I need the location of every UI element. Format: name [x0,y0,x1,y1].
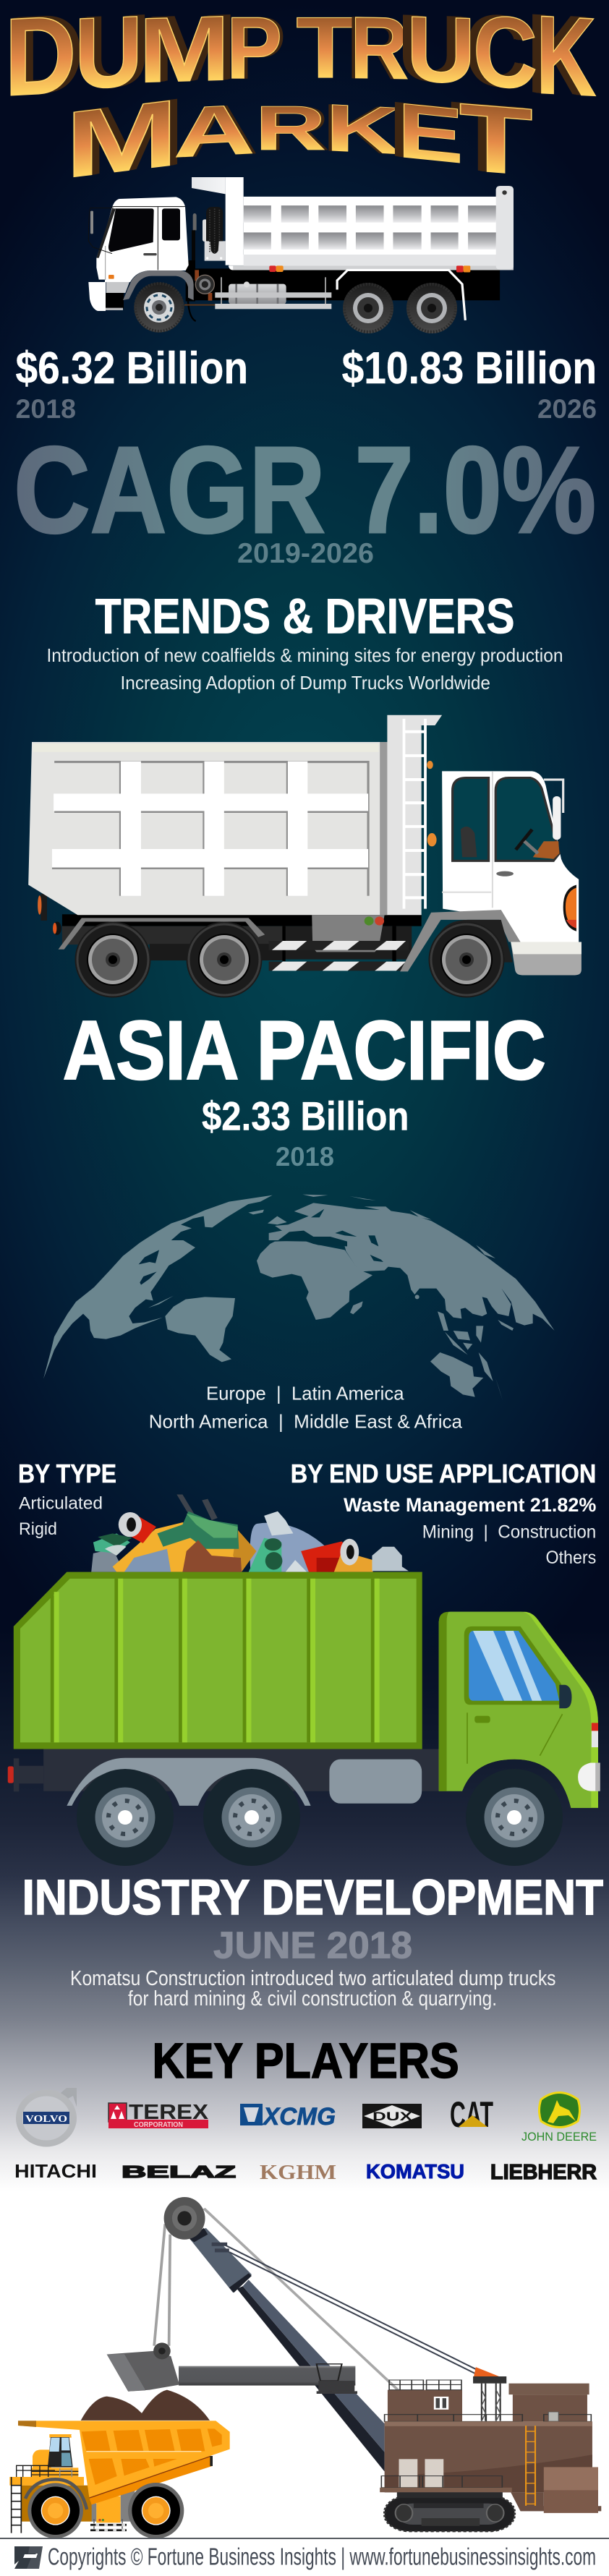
development date: JUNE 2018 [213,1925,412,1967]
gantry [473,2367,506,2421]
heading: trends and drivers: TRENDS & DRIVERS [95,589,515,644]
logo: John Deere [521,2093,597,2144]
year 2018: 2018 [16,393,76,424]
rear frame [92,2490,135,2522]
wheel: front [428,921,505,998]
tank block with lamps [96,2496,121,2522]
illustration: white dump truck [88,177,514,333]
container [14,1572,422,1749]
British Isles [268,1216,287,1224]
trend line 1: Introduction of new coalfields & mining sites for energy production [46,644,563,666]
logo: Fortune Business Insights [14,2546,43,2569]
South America [165,1297,235,1362]
front lights [592,1723,598,1731]
title: Dump Truck Market: E [398,87,463,180]
shovel boom [189,2228,385,2472]
title: Dump Truck Market: A [174,89,255,172]
access ladder [12,2477,21,2533]
spare tyre [206,207,223,254]
wheel: front [135,282,184,333]
wheel: rear 2 [187,921,262,998]
Mediterranean [277,1231,347,1246]
steps [90,2519,127,2532]
CAGR period: 2019-2026 [237,538,374,569]
fuel tank [229,284,286,304]
application: others: Others [545,1548,596,1568]
cab [31,2434,83,2477]
windscreen [464,1626,561,1705]
machinery house [380,2380,601,2513]
exhaust [193,213,197,230]
illustration: rope shovel [81,2197,601,2531]
tank with indicator lamps [312,915,385,952]
bed underside [89,2457,212,2504]
pillar and mirror [96,208,116,258]
front lamps under bed [269,265,276,272]
logo: CAT [450,2094,493,2135]
side rails [221,277,222,304]
chassis [43,1749,440,1791]
logo: Volvo: VOLVO [25,2114,67,2125]
chassis [193,268,500,300]
deck [9,2477,84,2486]
mirror [544,780,563,813]
logo: Terex: CORPORATION [134,2121,183,2129]
door handle [143,253,157,255]
Iceland [248,1210,264,1214]
Asian islands [302,1195,514,1355]
wheel: haul truck front [27,2483,83,2538]
rear bracket [337,270,465,320]
wheel: front [466,1769,563,1866]
logo: Hitachi: HITACHI [14,2160,97,2182]
wheel: rear 1 [75,921,150,998]
logo: Belaz: BELAZ [122,2162,236,2181]
type: rigid: Rigid [19,1519,57,1539]
logo: Terex [108,2101,209,2129]
crawler track [385,2492,515,2531]
application: mining and construction: Mining | Construction [422,1522,596,1542]
bumper [88,282,106,311]
cab [439,1612,598,1808]
regions line 2: North America | Middle East & Africa [149,1411,463,1433]
step bars [269,941,409,971]
application: waste management share: Waste Management 21.82% [344,1494,596,1516]
bumper [511,942,582,975]
title: Dump Truck Market: K [325,90,401,168]
North America and Greenland [43,1195,273,1379]
side box [329,1760,422,1804]
title: Dump Truck Market: T [459,83,533,195]
Madagascar [350,1301,363,1314]
title: Dump Truck Market: R [350,0,409,98]
logo: John Deere: JOHN DEERE [521,2130,597,2144]
headlight [563,884,576,931]
windscreen [108,208,154,252]
background: fade to white [0,1627,609,2576]
dump bed [28,742,386,915]
dump body [229,186,514,270]
year 2026: 2026 [537,393,597,424]
logo: Komatsu: KOMATSU [366,2160,464,2183]
title: Dump Truck Market: P [226,0,282,98]
rear tail lights [456,265,464,273]
cab guard [192,177,226,194]
ladder [404,719,425,909]
title: Dump Truck Market [4,0,596,198]
haul truck load [81,2390,210,2421]
front wheel arch [123,270,194,300]
Eurasia [269,1203,555,1331]
heading: key players: KEY PLAYERS [152,2033,459,2089]
chassis [62,914,422,926]
dipper handle and bucket [107,2342,357,2394]
wheel: rear 2 [203,1769,300,1866]
sheave wheel [164,2197,205,2240]
heading: Asia Pacific: ASIA PACIFIC [63,1005,545,1097]
grille [106,282,129,293]
logo: Volvo [19,2088,77,2144]
illustration: yellow haul truck [9,2421,230,2538]
wheel: rear 1 [343,283,393,333]
heading: by type: BY TYPE [18,1459,116,1488]
dump bed [18,2421,230,2497]
guard rails [17,2465,55,2477]
wheel arch [25,2479,87,2509]
wheel arch fender [67,1758,311,1806]
indicator lamp [108,275,114,279]
side window [162,208,180,240]
logo: DUX: DUX [372,2110,413,2123]
logo: DUX [362,2104,422,2128]
New Guinea and Pacific islands [479,1352,503,1401]
white bed reinforcements [52,762,368,896]
logo: XCMG: XCMG [262,2103,336,2131]
trend line 2: Increasing Adoption of Dump Trucks Worldwide [120,672,490,694]
Australia [430,1352,483,1397]
development text line 2: for hard mining & civil construction & quarrying. [128,1987,497,2010]
regions line 1: Europe | Latin America [206,1383,404,1404]
rubbish pile [91,1494,409,1572]
spare tyre bracket [203,219,208,242]
Asia Pacific year: 2018 [276,1141,334,1172]
Africa [257,1240,372,1320]
title: Dump Truck Market: M [65,80,179,198]
logo: Liebherr: LIEBHERR [490,2161,597,2184]
Caribbean islands [148,1296,174,1308]
cab guard tower [387,715,442,915]
logo: CAT: CAT [450,2094,493,2135]
front wheel arch [400,910,521,971]
world map [43,1195,555,1401]
wheel: rear 1 [77,1769,174,1866]
Asia Pacific value: $2.33 Billion [202,1093,409,1139]
footer rule [0,2538,609,2539]
Sri Lanka [415,1295,420,1299]
cab [442,771,579,942]
title: Dump Truck Market: R [255,93,326,163]
illustration: large grey dump truck [28,715,582,998]
cab body [96,197,189,282]
rust and air intake [195,270,199,281]
orange ladder [526,2426,535,2506]
tail lights [41,894,47,921]
logo: Terex: TEREX [129,2101,209,2124]
lower body [22,2486,93,2522]
wheel: haul truck rear [128,2483,184,2538]
title: Dump Truck Market: T [296,0,355,96]
engine hood [33,2449,51,2477]
illustration: green garbage truck [8,1494,600,1866]
hoist cables [154,2209,476,2421]
market value 2018: $6.32 Billion [16,344,248,393]
type: articulated: Articulated [19,1494,103,1514]
step [106,293,124,309]
rear fender [59,918,265,950]
wheel: rear 2 [406,283,457,333]
logo: KGHM: KGHM [260,2162,336,2184]
